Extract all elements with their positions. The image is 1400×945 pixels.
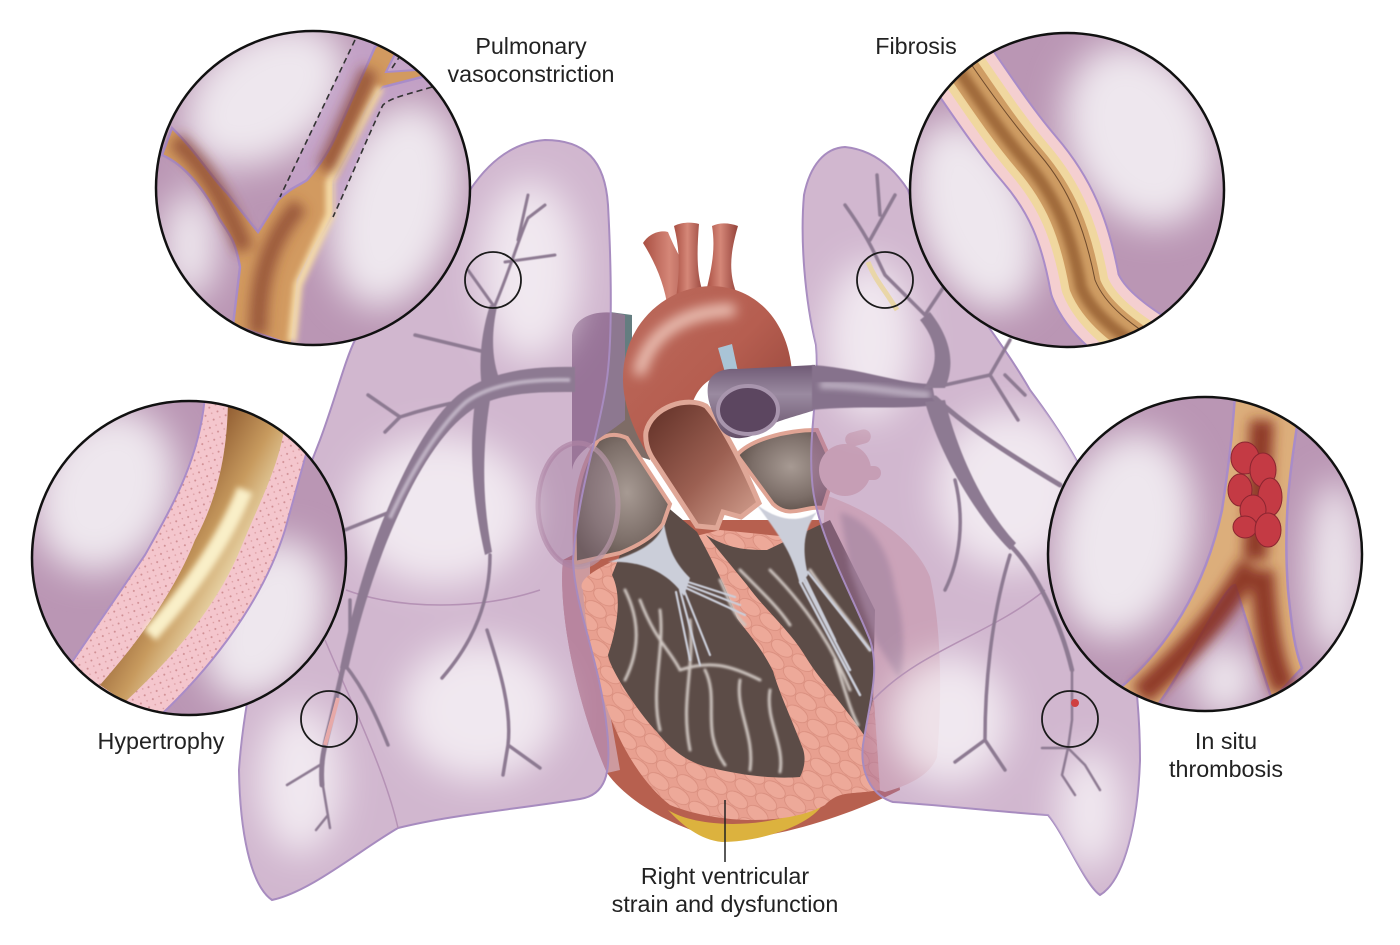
vena cava through lung (572, 312, 625, 470)
lens ring (1048, 397, 1362, 711)
thrombus mark (1071, 699, 1079, 707)
lens ring (910, 33, 1224, 347)
lens ring (156, 31, 470, 345)
fibrosis vessel mark (868, 262, 897, 310)
vessel (162, 40, 424, 345)
grey wall patch (840, 512, 903, 680)
lobes (34, 404, 344, 712)
lens ring (32, 401, 346, 715)
small locator circles (301, 252, 1098, 747)
heart outer wall (562, 520, 900, 840)
lumen (100, 395, 285, 702)
right lung (803, 147, 1140, 895)
ductus remnant (718, 344, 738, 376)
mitral valve and chordae (757, 505, 870, 695)
lens tissue (33, 402, 345, 714)
left ventricle cavity (706, 520, 875, 735)
ascending aorta (646, 402, 759, 528)
panel: fibrosis (908, 32, 1226, 348)
pulmonary trunk (708, 365, 815, 438)
trabeculae (625, 570, 870, 772)
left atrium chamber (737, 430, 835, 512)
left ventricle outer wall (820, 495, 940, 792)
heart (538, 223, 940, 842)
right lung tissue (803, 147, 1140, 895)
right main artery (812, 365, 936, 410)
label: in situ thrombosis: In situ (1195, 728, 1257, 754)
label: pulmonary vasoconstriction: Pulmonary (475, 33, 587, 59)
vessel (1120, 395, 1302, 705)
tricuspid valve and chordae (608, 524, 745, 665)
label: pulmonary vasoconstriction: vasoconstriction (447, 61, 615, 87)
label: right ventricular strain: strain and dysfunction (612, 891, 838, 917)
label: in situ thrombosis: thrombosis (1169, 756, 1283, 782)
right vessel highlight (820, 385, 930, 395)
locator: fibrosis (857, 252, 913, 308)
left lung fissure (325, 590, 540, 828)
left main artery (340, 367, 575, 670)
left lung highlights (258, 180, 580, 855)
middle branch (472, 400, 492, 555)
superior vena cava (610, 312, 632, 400)
fine branches (845, 175, 1100, 795)
aortic arch (623, 286, 792, 462)
myocardium (582, 530, 880, 820)
panel: hypertrophy (30, 400, 348, 716)
fine branches (287, 195, 555, 830)
left lung (239, 140, 611, 900)
left atrial appendage (819, 428, 881, 496)
label: hypertrophy: Hypertrophy (98, 728, 225, 754)
lobes (911, 36, 1223, 330)
right lung fissure (873, 590, 1045, 700)
vessel cream edge (292, 87, 380, 342)
left vessel highlight (390, 380, 570, 518)
panel: pulmonary vasoconstriction (154, 30, 472, 346)
right atrium ring (538, 443, 618, 567)
locator: hypertrophy (301, 691, 357, 747)
callout line to heart (724, 800, 726, 862)
lobes (1037, 418, 1363, 718)
thrombus (1228, 442, 1282, 547)
dashed outlines (280, 40, 432, 217)
pulmonary valve opening (718, 386, 778, 434)
lens tissue (1049, 398, 1361, 710)
lens tissue (157, 32, 469, 344)
fork lobe (386, 52, 416, 72)
right pulmonary vessels (812, 175, 1100, 795)
lower trunk (925, 400, 1016, 550)
right lung highlights (825, 260, 1122, 870)
hypertrophy vessel mark (325, 698, 338, 745)
hypertrophied wall (70, 395, 310, 725)
left pulmonary vessels (287, 195, 575, 830)
vessel shading (1140, 420, 1285, 695)
apex fat band (668, 800, 825, 842)
upper trunk (920, 312, 950, 388)
aortic arch highlight (640, 310, 730, 370)
grey tissue behind great vessels (605, 395, 650, 460)
lobes (158, 32, 469, 326)
narrowing highlight (150, 490, 245, 635)
lens tissue (911, 34, 1223, 346)
left wall through lung tint (562, 560, 620, 773)
right atrium chamber (575, 435, 670, 563)
label: right ventricular strain: Right ventricular (641, 863, 809, 889)
panel: in situ thrombosis (1037, 390, 1370, 720)
aorta neck vessels (643, 223, 738, 310)
upper branch (480, 305, 502, 388)
constricted wall (282, 40, 430, 212)
vessel shading (175, 70, 370, 335)
label: fibrosis: Fibrosis (875, 33, 957, 59)
fibrotic vessel layers (946, 45, 1172, 360)
left lung tissue (239, 140, 611, 900)
locator: thrombosis (1042, 691, 1098, 747)
locator: vasoconstriction (465, 252, 521, 308)
right ventricle cavity (608, 505, 805, 778)
